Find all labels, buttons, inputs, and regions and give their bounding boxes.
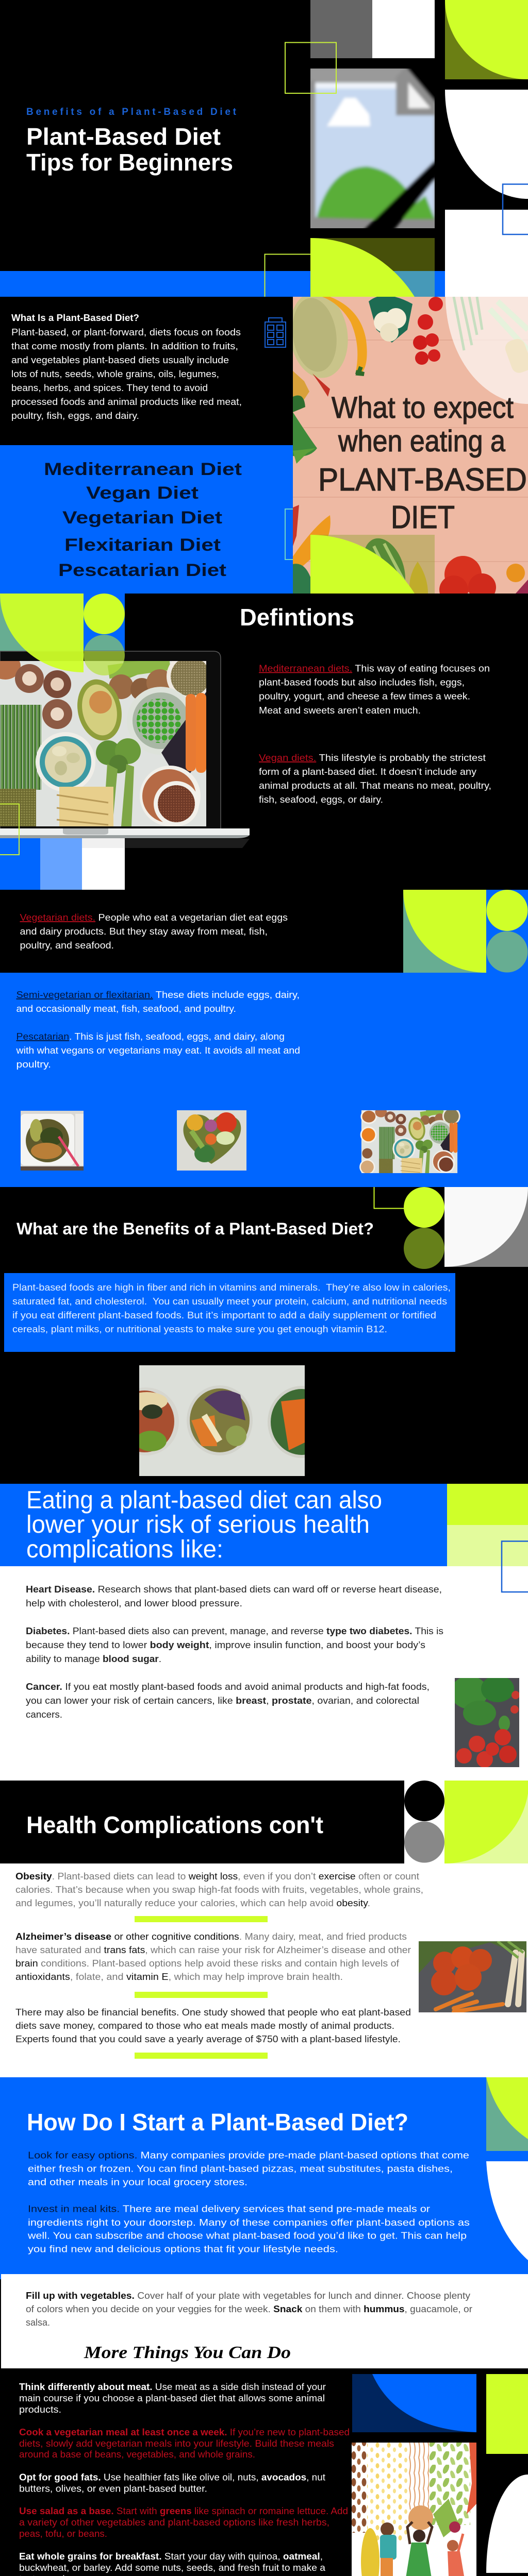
decorative block: white quarter [486, 2475, 528, 2573]
title: Tips for Beginners [26, 149, 233, 176]
text: pescatarian: poultry. [16, 1059, 51, 1070]
tip: think differently about meat: Think differently about meat. Use meat as a side dish instead of your [19, 2382, 326, 2392]
callout: benefits text: cereals, plant milks, or nutritional yeasts to make sure you get enough vitamin B12. [12, 1324, 387, 1334]
text: invest in meal kits: you find new and delicious options that fit your lifestyle needs. [28, 2244, 338, 2255]
image: basil and tomatoes [451, 1675, 520, 1768]
text: pescatarian: with what vegans or vegetarians may eat. It avoids all meat and [15, 1045, 300, 1056]
subtitle: Benefits of a Plant-Based Diet [26, 107, 238, 117]
callout: benefits text: saturated fat, and cholesterol. You can usually meet your protein, calcium, and nutritional needs [12, 1296, 447, 1307]
tip: cook a vegetarian meal: diets, slowly add vegetarian meals into your lifestyle. Build these meals [19, 2438, 334, 2449]
image: food spread [359, 1107, 460, 1175]
text: financial benefits: diets save money, compared to those who eat meals made mostly of animal products. [15, 2021, 394, 2031]
text: vegan diets: Vegan diets. This lifestyle is probably the strictest [259, 753, 486, 763]
poster headline: when eating a [338, 425, 506, 458]
panel: diet types list: Pescatarian Diet [58, 561, 226, 580]
text: alzheimer's: Alzheimer’s disease or other cognitive conditions . Many dairy, meat, and fried products [15, 1931, 407, 1942]
heading: definitions: Defintions [240, 604, 354, 631]
image: laptop with food photo [0, 651, 250, 848]
text block: that come mostly from plants. In addition to fruits, [11, 341, 238, 351]
text: diabetes: because they tend to lower body weight , improve insulin function, and boost your body’s [26, 1640, 425, 1650]
text: heart disease: Heart Disease. Research shows that plant-based diets can ward off or reverse heart disease, [26, 1584, 442, 1595]
tip: whole grains for breakfast: buckwheat, or barley. Add some nuts, seeds, and fresh fruit to make a [19, 2563, 326, 2573]
text: financial benefits: There may also be financial benefits. One study showed that people who eat plant-based [15, 2007, 411, 2018]
text: vegan diets: form of a plant-based diet. It doesn’t include any [259, 767, 476, 777]
panel: diet types list: Vegan Diet [86, 483, 199, 503]
text: financial benefits: Experts found that you could save a yearly average of $750 with a plant-based lifestyle. [15, 2034, 401, 2044]
decorative block: right shapes [403, 890, 528, 973]
text block: beans, herbs, and spices. They tend to avoid [11, 383, 208, 393]
text: financial benefits [15, 2007, 411, 2044]
icon: building [265, 318, 286, 347]
panel: diet types list: Flexitarian Diet [64, 535, 221, 555]
panel: benefits [0, 1187, 528, 1484]
text: look for easy options: and other meals in your local grocery stores. [28, 2177, 248, 2188]
poster headline: What to expect [332, 391, 514, 425]
panel: what is a plant-based diet [0, 297, 293, 445]
text: semi-vegetarian: and occasionally meat, fish, seafood, and poultry. [16, 1004, 236, 1014]
tip: cook a vegetarian meal: Cook a vegetarian meal at least once a week. If you’re new to plant-based [19, 2427, 350, 2437]
text: semi-vegetarian [16, 990, 300, 1014]
decorative block: navy and blue quarter [352, 2374, 476, 2432]
text: cancer: cancers. [26, 1709, 62, 1720]
image: three bowls [139, 1365, 305, 1476]
text: alzheimer's [15, 1931, 411, 1982]
text: diabetes: Diabetes. Plant-based diets also can prevent, manage, and reverse type two diabetes. This is [26, 1626, 443, 1636]
text: alzheimer's: have saturated and trans fats , which can raise your risk for Alzheimer’s disease and other [15, 1945, 411, 1955]
callout: benefits text [4, 1273, 455, 1352]
heading: complications like: [26, 1536, 223, 1563]
text: diabetes [26, 1626, 443, 1664]
heading: more things: More Things You Can Do [84, 2343, 291, 2362]
panel: how do i start [0, 2077, 528, 2279]
text: vegan diets [259, 753, 491, 805]
text block: Fill up with vegetables. Cover half of your plate with vegetables for lunch and dinner. Choose plenty [26, 2291, 470, 2301]
text block: processed foods and animal products like red meat, [11, 397, 242, 407]
text block: lots of nuts, seeds, whole grains, oils, legumes, [11, 369, 219, 379]
image: salad tray [21, 1111, 84, 1171]
text: cancer: Cancer. If you eat mostly plant-based foods and avoid animal products and high-fat foods, [26, 1682, 430, 1692]
text: obesity: and legumes, you’ll naturally reduce your calories, which can help avoid obesity. [15, 1898, 370, 1908]
text: pescatarian [15, 1031, 300, 1070]
text: pescatarian: Pescatarian . This is just fish, seafood, eggs, and dairy, along [16, 1031, 285, 1042]
heading: What Is a Plant-Based Diet? [11, 313, 139, 323]
callout: benefits text: Plant-based foods are high in fiber and rich in vitamins and minerals. They’re also low in calories, [12, 1282, 451, 1293]
tip: use salad as a base: Use salad as a base. Start with greens like spinach or romaine lettuce. Add [19, 2506, 348, 2516]
heading: Eating a plant-based diet can also [26, 1487, 382, 1514]
tip: use salad as a base: peas, tofu, or beans. [19, 2529, 107, 2539]
text: alzheimer's: antioxidants , folate, and vitamin E , which may help improve brain health. [15, 1972, 343, 1982]
tip: whole grains for breakfast: Eat whole grains for breakfast. Start your day with quinoa, oatmeal, [19, 2551, 323, 2562]
text: vegetarian diets [20, 912, 288, 951]
panel: diet types list: Mediterranean Diet [44, 460, 242, 479]
text block: of colors when you decide on your veggies for the week. Snack on them with hummus, guacamole, or [26, 2304, 472, 2314]
panel: lower your risk [0, 1484, 528, 1781]
text: heart disease [26, 1584, 442, 1608]
divider bar [135, 1992, 268, 1998]
text: mediterranean diets: Mediterranean diets. This way of eating focuses on [259, 664, 490, 674]
text: look for easy options: Look for easy options. Many companies provide pre-made plant-based options that come [28, 2150, 469, 2161]
poster headline: DIET [391, 500, 455, 535]
image: what to expect poster [284, 288, 528, 606]
text block: and vegetables plant-based diets usually include [11, 355, 229, 365]
tip: think differently about meat: products. [19, 2404, 61, 2415]
title: Plant-Based Diet [26, 123, 221, 150]
decorative block: lime rectangle [486, 2374, 528, 2454]
image: vegetable heart [177, 1110, 246, 1171]
tip: opt for good fats: butters, olives, or even plant-based butter. [19, 2483, 207, 2494]
tip: cook a vegetarian meal: around a base of beans, vegetables, and whole grains. [19, 2449, 255, 2460]
callout: benefits text: if you eat different plant-based foods. But it’s important to add a daily supplement or fortified [12, 1310, 436, 1320]
panel: health complications [0, 1781, 528, 2077]
icon: broken image placeholder [310, 64, 438, 232]
heading [26, 1487, 382, 1563]
tip: use salad as a base [19, 2506, 348, 2539]
text: mediterranean diets [259, 664, 490, 716]
tip: think differently about meat [19, 2382, 326, 2415]
divider bar [135, 1916, 268, 1922]
text: vegan diets: fish, seafood, eggs, or dairy. [259, 794, 383, 805]
panel: more things list [19, 2374, 528, 2576]
heading: How Do I Start a Plant-Based Diet? [27, 2109, 408, 2136]
text: semi-vegetarian: Semi-vegetarian or flexitarian. These diets include eggs, dairy, [16, 990, 300, 1000]
text: vegetarian diets: and dairy products. But they stay away from meat, fish, [20, 926, 268, 937]
tip: opt for good fats: Opt for good fats. Use healthier fats like olive oil, nuts, avocados, nut [19, 2472, 325, 2482]
panel: hero [0, 0, 528, 297]
text: vegetarian diets: Vegetarian diets. People who eat a vegetarian diet eat eggs [20, 912, 288, 923]
text: look for easy options: either fresh or frozen. You can find plant-based pizzas, meat substitutes, pasta dishes, [28, 2164, 453, 2174]
text: alzheimer's: brain conditions. Plant-based options help avoid these risks and contain high levels of [15, 1958, 400, 1969]
text: obesity: calories. That’s because when you swap high-fat foods with fruits, vegetables, whole grains, [15, 1885, 423, 1895]
text: cancer: you can lower your risk of certain cancers, like breast , prostate , ovarian, and colorectal [26, 1696, 419, 1706]
panel: diet types list: Vegetarian Diet [62, 508, 222, 528]
text: obesity: Obesity . Plant-based diets can lead to weight loss , even if you don’t exercise often or count [15, 1871, 419, 1882]
tip: cook a vegetarian meal [19, 2427, 350, 2460]
text: mediterranean diets: poultry, yogurt, and cheese a few times a week. [259, 691, 470, 702]
text: obesity [15, 1871, 423, 1908]
heading: What are the Benefits of a Plant-Based Diet? [16, 1219, 374, 1238]
text: mediterranean diets: plant-based foods but also includes fish, eggs, [259, 677, 465, 687]
text: vegan diets: animal products at all. That means no meat, poultry, [259, 781, 491, 791]
text block [11, 327, 242, 421]
poster headline [318, 391, 527, 535]
text: look for easy options [28, 2150, 469, 2188]
text: invest in meal kits: Invest in meal kits. There are meal delivery services that send pre-made meals or [28, 2204, 430, 2214]
tip: whole grains for breakfast [19, 2551, 326, 2576]
tip: use salad as a base: a variety of other vegetables and plant-based options like fresh herbs, [19, 2517, 329, 2528]
text: vegetarian diets: poultry, and seafood. [20, 940, 114, 951]
text block: poultry, fish, eggs, and dairy. [11, 411, 139, 421]
text: diabetes: ability to manage blood sugar . [26, 1654, 161, 1664]
tip: opt for good fats [19, 2472, 325, 2494]
tip: think differently about meat: main course if you choose a plant-based diet that allows some animal [19, 2393, 325, 2403]
text block: Plant-based, or plant-forward, diets focus on foods [11, 327, 241, 337]
panel: diet types list [0, 445, 293, 594]
image: tomatoes and carrots [419, 1941, 526, 2012]
text: invest in meal kits: well. You can subscribe and choose what plant-based food you’d like to get. This can help [27, 2231, 467, 2241]
text: heart disease: help with cholesterol, and lower blood pressure. [26, 1598, 242, 1608]
text: mediterranean diets: Meat and sweets aren’t eaten much. [259, 705, 421, 716]
panel: definitions [0, 594, 528, 973]
text: cancer [26, 1682, 430, 1720]
text block: salsa. [26, 2317, 50, 2328]
text: invest in meal kits [27, 2204, 470, 2255]
panel: semi-vegetarian and pescatarian [0, 973, 528, 1187]
heading: Health Complications con't [26, 1811, 323, 1838]
image: people carrying vegetables [352, 2443, 476, 2576]
panel: fill up with vegetables [1, 2274, 528, 2368]
heading: lower your risk of serious health [26, 1511, 370, 1538]
text block [26, 2291, 472, 2328]
title [26, 123, 233, 176]
divider bar [135, 2053, 268, 2059]
text: invest in meal kits: ingredients right to your doorstep. Many of these companies offer plant-based options as [28, 2217, 470, 2228]
